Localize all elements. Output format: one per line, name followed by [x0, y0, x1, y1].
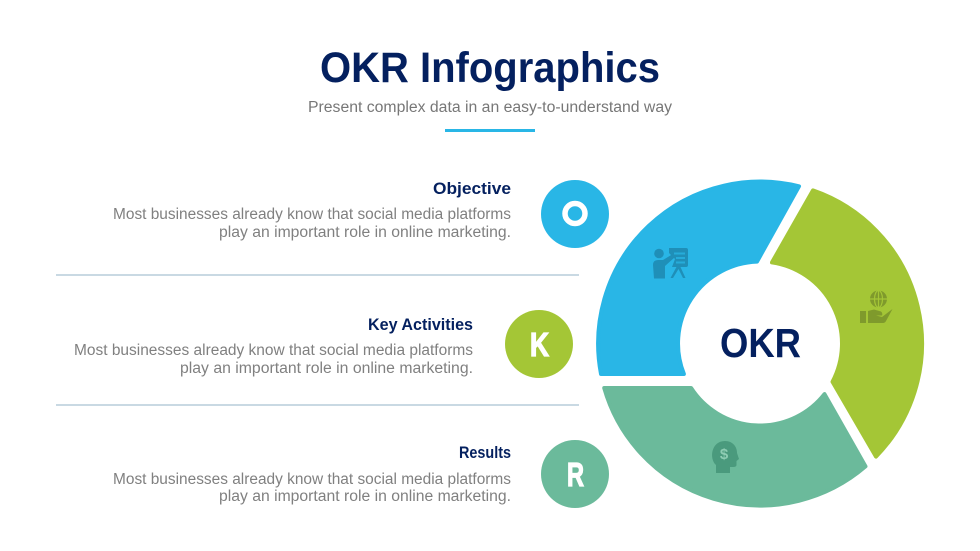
icon: globe on hand	[860, 290, 892, 323]
badge: R	[541, 440, 609, 508]
heading: key activities: Key Activities	[368, 315, 473, 334]
segment: objective	[598, 182, 799, 374]
title: OKR Infographics	[320, 44, 660, 92]
text: key activities: Most businesses already know that social media platforms	[74, 342, 473, 359]
donut chart	[598, 182, 922, 505]
text: objective	[113, 206, 511, 241]
badge: K: K	[530, 326, 549, 363]
badge: O	[541, 180, 609, 248]
segment: key activities	[772, 190, 922, 457]
heading: results: Results	[459, 443, 511, 462]
icon: head with dollar	[712, 441, 739, 473]
text: key activities	[74, 342, 473, 377]
title accent line	[445, 129, 535, 132]
subtitle: Present complex data in an easy-to-understand way	[308, 99, 672, 116]
center label: OKR	[720, 320, 801, 366]
text: objective: Most businesses already know that social media platforms	[113, 206, 511, 223]
text: results: Most businesses already know that social media platforms	[113, 471, 511, 488]
icon: head with dollar: $	[720, 446, 729, 463]
panel: results	[113, 440, 609, 508]
badge: R: R	[567, 456, 584, 493]
icon: presenter at board	[653, 248, 688, 278]
segment: results	[604, 388, 866, 505]
text: objective: play an important role in online marketing.	[219, 224, 511, 241]
text: results	[113, 471, 511, 505]
panel: objective	[113, 179, 609, 248]
text: results: play an important role in online marketing.	[219, 488, 511, 505]
panel: key activities	[74, 310, 573, 378]
text: key activities: play an important role in online marketing.	[180, 360, 473, 377]
badge: K	[505, 310, 573, 378]
heading: objective: Objective	[433, 179, 511, 198]
